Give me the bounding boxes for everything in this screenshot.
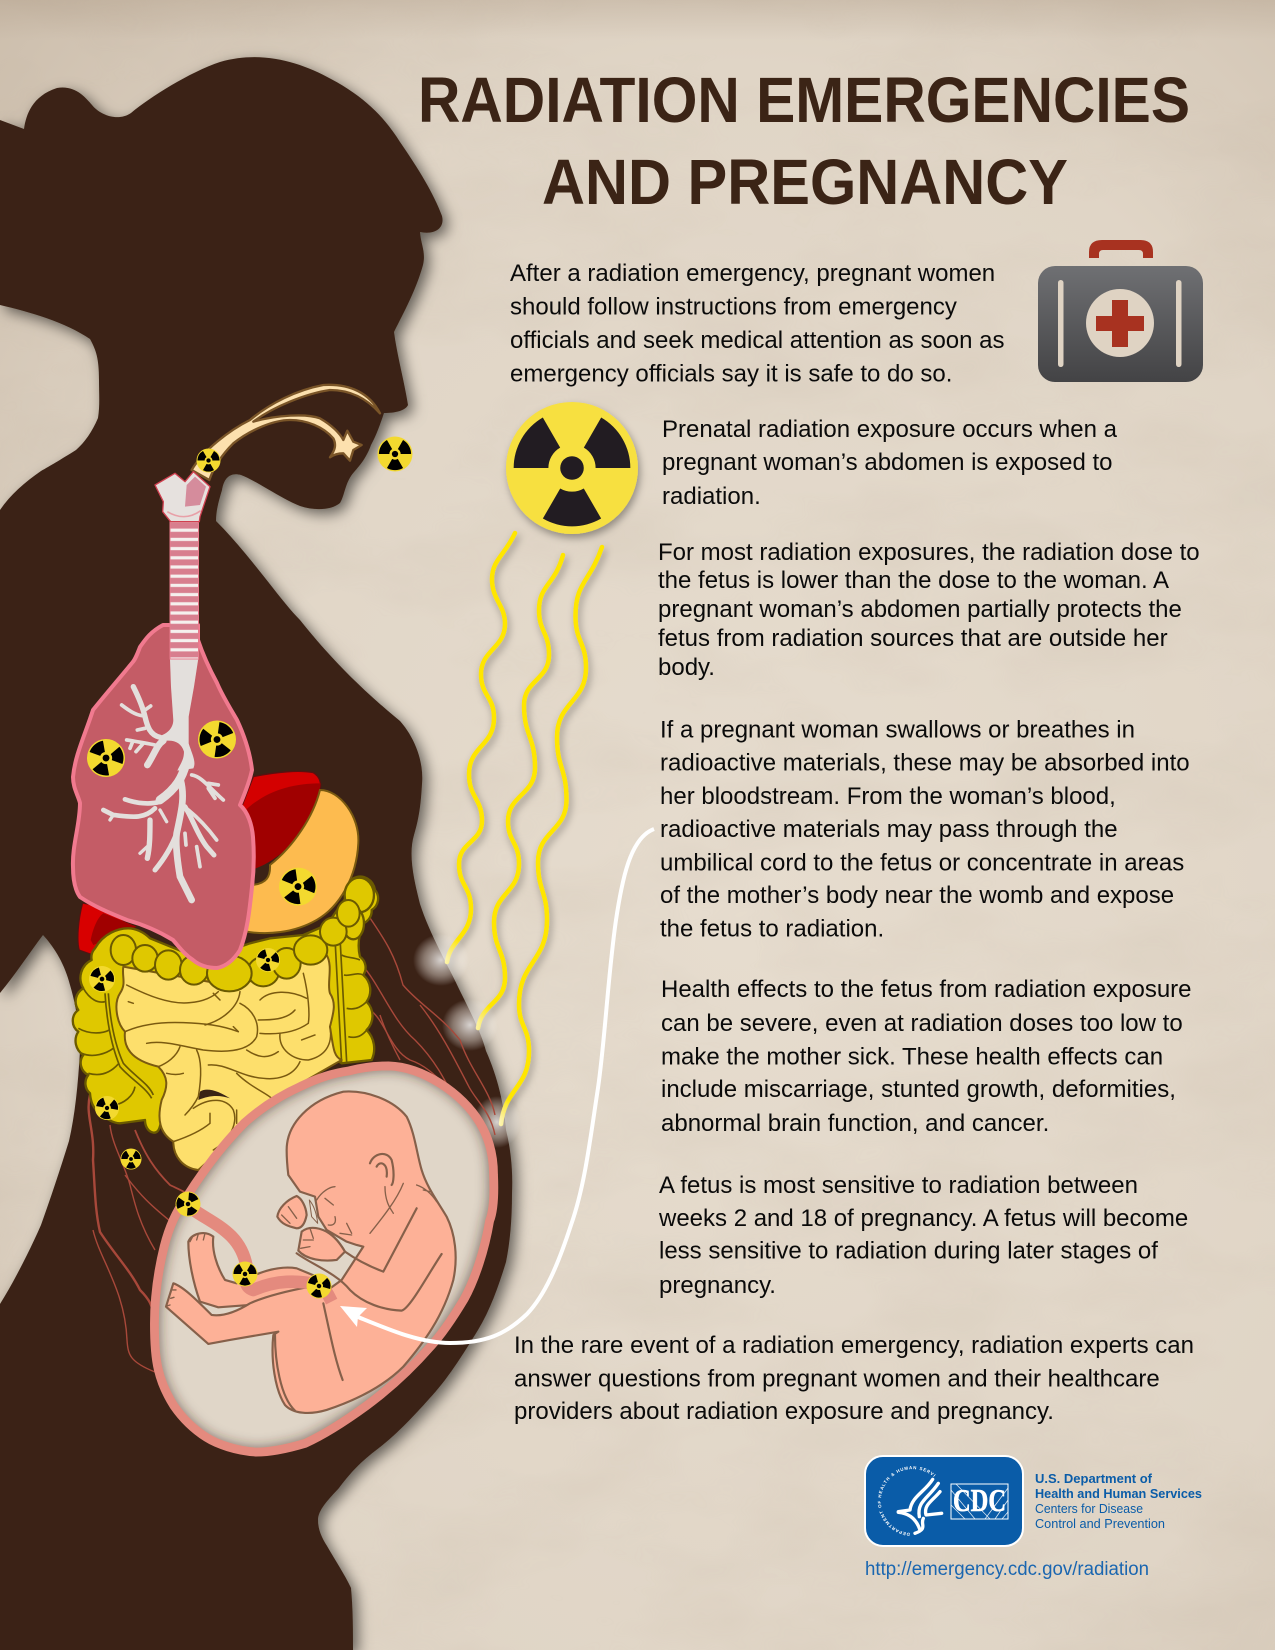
head and body bbox=[166, 1091, 456, 1413]
text: dose to the fetus: body. bbox=[658, 654, 715, 681]
HHS seal bbox=[878, 1466, 944, 1536]
lungs bbox=[73, 625, 254, 968]
CDC mark: CDC bbox=[953, 1482, 1006, 1518]
title: AND PREGNANCY bbox=[542, 146, 1068, 218]
icon: large radiation symbol bbox=[506, 402, 638, 534]
text: health effects: abnormal brain function, and cancer. bbox=[661, 1110, 1049, 1137]
text: sensitivity by week: less sensitive to radiation during later stages of bbox=[659, 1238, 1158, 1264]
text: intro paragraph: After a radiation emergency, pregnant women bbox=[510, 260, 995, 287]
text: sensitivity by week: pregnancy. bbox=[659, 1272, 776, 1299]
larynx bbox=[155, 472, 210, 522]
bronchial tree bbox=[103, 658, 223, 900]
text: radiation experts: In the rare event of a radiation emergency, radiation experts can bbox=[514, 1332, 1194, 1359]
radiation in lungs bbox=[81, 733, 131, 783]
back leg and foot bbox=[188, 1233, 317, 1307]
icon: first aid kit bbox=[1038, 240, 1203, 382]
womb bbox=[151, 1062, 497, 1456]
agency name: Control and Prevention bbox=[1035, 1517, 1165, 1531]
website url: http://emergency.cdc.gov/radiation bbox=[865, 1559, 1149, 1580]
hands bbox=[277, 1196, 307, 1228]
radiation particles in abdomen bbox=[86, 945, 283, 1170]
text: prenatal exposure: radiation. bbox=[662, 483, 761, 510]
text: sensitivity by week: A fetus is most sensitive to radiation between bbox=[659, 1172, 1138, 1199]
text: swallowed materials: If a pregnant woman swallows or breathes in bbox=[660, 716, 1135, 744]
text: swallowed materials: of the mother’s body near the womb and expose bbox=[660, 882, 1174, 909]
large intestine transverse colon bbox=[111, 900, 360, 991]
text: health effects: make the mother sick. These health effects can bbox=[661, 1044, 1163, 1070]
text: swallowed materials: umbilical cord to the fetus or concentrate in areas bbox=[660, 850, 1184, 876]
text: health effects: can be severe, even at radiation doses too low to bbox=[661, 1010, 1183, 1037]
text: radiation experts: providers about radiation exposure and pregnancy. bbox=[514, 1398, 1054, 1425]
text: dose to the fetus: pregnant woman’s abdomen partially protects the bbox=[658, 596, 1182, 623]
agency name bbox=[1035, 1472, 1202, 1531]
white arrow bbox=[340, 829, 654, 1343]
agency name: U.S. Department of bbox=[1035, 1472, 1153, 1486]
small intestine bbox=[116, 955, 342, 1170]
HHS seal: DEPARTMENT OF HEALTH & HUMAN SERVICES · USA bbox=[878, 1466, 936, 1536]
nasal passage bbox=[192, 385, 380, 480]
text: swallowed materials: her bloodstream. From the woman’s blood, bbox=[660, 783, 1116, 810]
radiation waves bbox=[447, 533, 602, 1124]
title bbox=[418, 64, 1190, 218]
text: dose to the fetus: the fetus is lower than the dose to the woman. A bbox=[658, 567, 1169, 594]
title: RADIATION EMERGENCIES bbox=[418, 64, 1190, 136]
large intestine bbox=[73, 877, 378, 1133]
text: health effects: include miscarriage, stunted growth, deformities, bbox=[661, 1076, 1176, 1103]
radiation glow where waves enter body bbox=[413, 934, 521, 1148]
radiation particle in stomach bbox=[273, 862, 323, 912]
text: swallowed materials: radioactive materials, these may be absorbed into bbox=[660, 750, 1190, 776]
text: radiation experts: answer questions from pregnant women and their healthcare bbox=[514, 1366, 1160, 1392]
agency name: Centers for Disease bbox=[1035, 1502, 1143, 1516]
text: prenatal exposure: pregnant woman’s abdomen is exposed to bbox=[662, 449, 1113, 476]
fetus bbox=[166, 1091, 456, 1413]
text: prenatal exposure: Prenatal radiation exposure occurs when a bbox=[662, 416, 1118, 443]
liver bbox=[242, 771, 321, 869]
text: health effects: Health effects to the fetus from radiation exposure bbox=[661, 976, 1192, 1003]
radiation particle at throat bbox=[196, 448, 221, 472]
fetus details bbox=[167, 1154, 442, 1411]
left lobe of liver behind lungs bbox=[78, 903, 137, 955]
text: intro paragraph: should follow instructions from emergency bbox=[510, 294, 957, 320]
trachea bbox=[170, 521, 198, 659]
text: intro paragraph: officials and seek medical attention as soon as bbox=[510, 327, 1005, 354]
text: dose to the fetus: fetus from radiation sources that are outside her bbox=[658, 625, 1168, 652]
radiation particle outside mouth bbox=[377, 436, 413, 472]
radiation in lung, right bbox=[192, 715, 242, 764]
text: swallowed materials: the fetus to radiation. bbox=[660, 916, 884, 942]
text: intro paragraph: emergency officials say it is safe to do so. bbox=[510, 360, 952, 388]
silhouette of pregnant woman bbox=[0, 57, 512, 1650]
logo: HHS and CDC bbox=[864, 1455, 1024, 1547]
umbilical cord bbox=[171, 1187, 335, 1302]
text: swallowed materials: radioactive materials may pass through the bbox=[660, 816, 1118, 843]
text: dose to the fetus: For most radiation exposures, the radiation dose to bbox=[658, 539, 1200, 566]
blood vessels bbox=[89, 918, 495, 1372]
text: sensitivity by week: weeks 2 and 18 of pregnancy. A fetus will become bbox=[658, 1205, 1188, 1232]
stomach bbox=[247, 790, 358, 933]
agency name: Health and Human Services bbox=[1035, 1487, 1202, 1501]
